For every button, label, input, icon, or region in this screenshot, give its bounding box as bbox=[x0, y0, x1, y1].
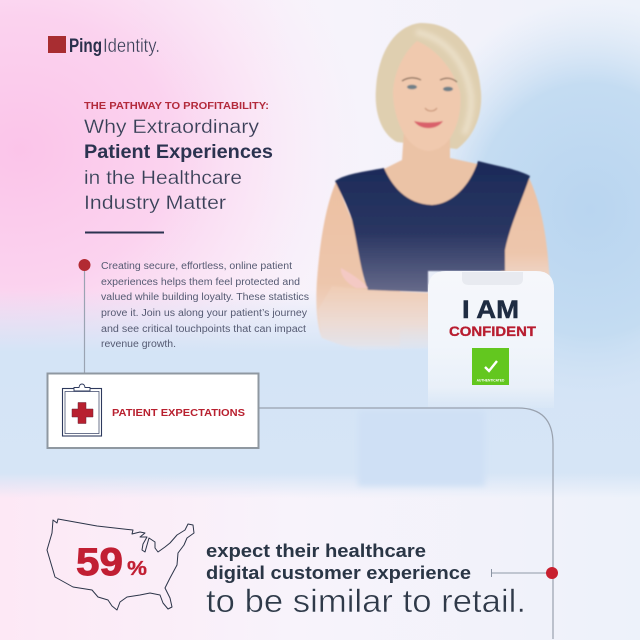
statistic description bbox=[206, 540, 526, 619]
heading: Patient Experiences bbox=[84, 141, 273, 163]
section badge: patient expectations: PATIENT EXPECTATIONS bbox=[112, 407, 245, 419]
statistic: 59%: % bbox=[127, 558, 147, 580]
nose bbox=[425, 108, 437, 111]
section badge: patient expectations bbox=[48, 374, 258, 448]
statistic: 59% bbox=[76, 541, 147, 584]
mouth bbox=[414, 121, 443, 128]
neck and chest bbox=[382, 130, 482, 230]
intro text block: Creating secure, effortless, online patient bbox=[101, 261, 292, 272]
intro text block: revenue growth. bbox=[101, 339, 176, 350]
phone headline: I AM bbox=[462, 296, 519, 324]
woman portrait illustration bbox=[316, 23, 552, 350]
intro text block: and see critical touchpoints that can impact bbox=[101, 324, 306, 335]
icon: map of the United States bbox=[47, 519, 194, 610]
callout connector and dot bbox=[491, 567, 558, 579]
statistic description: to be similar to retail. bbox=[206, 583, 526, 619]
statistic description: digital customer experience bbox=[206, 562, 471, 583]
hair highlight bbox=[416, 32, 471, 134]
logo: Ping Identity bbox=[48, 36, 160, 57]
phone mockup bbox=[428, 271, 554, 408]
timeline connector path bbox=[259, 408, 553, 639]
timeline dot: intro bbox=[78, 259, 90, 271]
eyebrows bbox=[402, 78, 457, 82]
statistic description: expect their healthcare bbox=[206, 540, 426, 561]
intro text block: prove it. Join us along your patient’s journey bbox=[101, 308, 307, 319]
timeline connector from intro to badge bbox=[84, 265, 86, 373]
phone mockup: CONFIDENT bbox=[449, 324, 537, 339]
heading: Industry Matter bbox=[84, 192, 227, 214]
intro text block bbox=[101, 261, 309, 350]
left upper arm bbox=[316, 182, 400, 346]
fingers bbox=[341, 268, 368, 288]
hair bbox=[376, 23, 481, 149]
logo: Ping Identity: Ping bbox=[69, 36, 102, 57]
crossed forearm bbox=[318, 286, 430, 350]
intro text block: valued while building loyalty. These statistics bbox=[101, 292, 309, 303]
face bbox=[393, 41, 460, 151]
navy dress bbox=[335, 161, 530, 292]
heading bbox=[84, 101, 273, 214]
heading: Why Extraordinary bbox=[84, 116, 259, 138]
icon: clipboard with medical cross bbox=[62, 384, 102, 436]
authenticated badge: AUTHENTICATED bbox=[477, 378, 505, 382]
heading: THE PATHWAY TO PROFITABILITY: bbox=[84, 101, 269, 112]
right arm bbox=[500, 176, 552, 300]
eyes bbox=[407, 85, 417, 89]
statistic: 59%: 59 bbox=[76, 541, 123, 584]
intro text block: experiences helps them feel protected and bbox=[101, 277, 300, 288]
logo: Ping Identity: Identity. bbox=[103, 36, 160, 57]
heading: in the Healthcare bbox=[84, 167, 242, 189]
